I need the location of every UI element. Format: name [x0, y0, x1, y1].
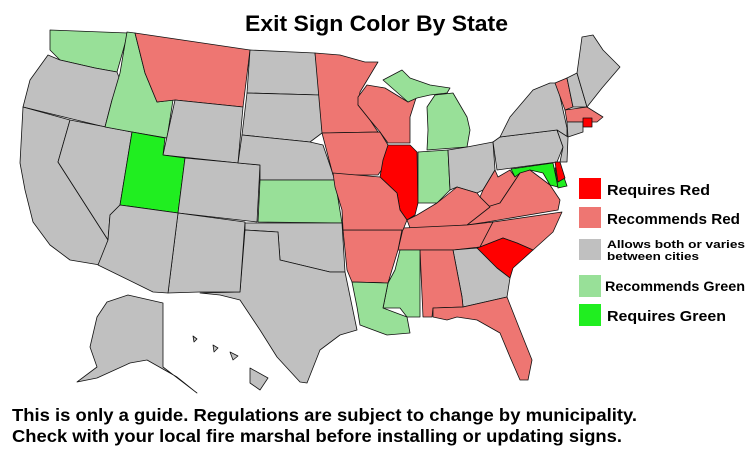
legend: Allows both or varies	[607, 239, 745, 251]
legend: Requires Green	[607, 308, 726, 325]
map: US states	[20, 30, 620, 393]
footer note: Check with your local fire marshal before installing or updating signs.	[12, 426, 622, 446]
legend: Recommends Red	[607, 211, 740, 228]
legend: Recommends Green	[605, 279, 745, 294]
legend: between cities	[607, 251, 699, 263]
footer note: This is only a guide. Regulations are subject to change by municipality.	[12, 405, 637, 425]
legend: Requires Red	[607, 182, 710, 199]
legend	[579, 178, 745, 326]
title: Exit Sign Color By State	[245, 11, 508, 36]
footer note	[12, 405, 637, 446]
